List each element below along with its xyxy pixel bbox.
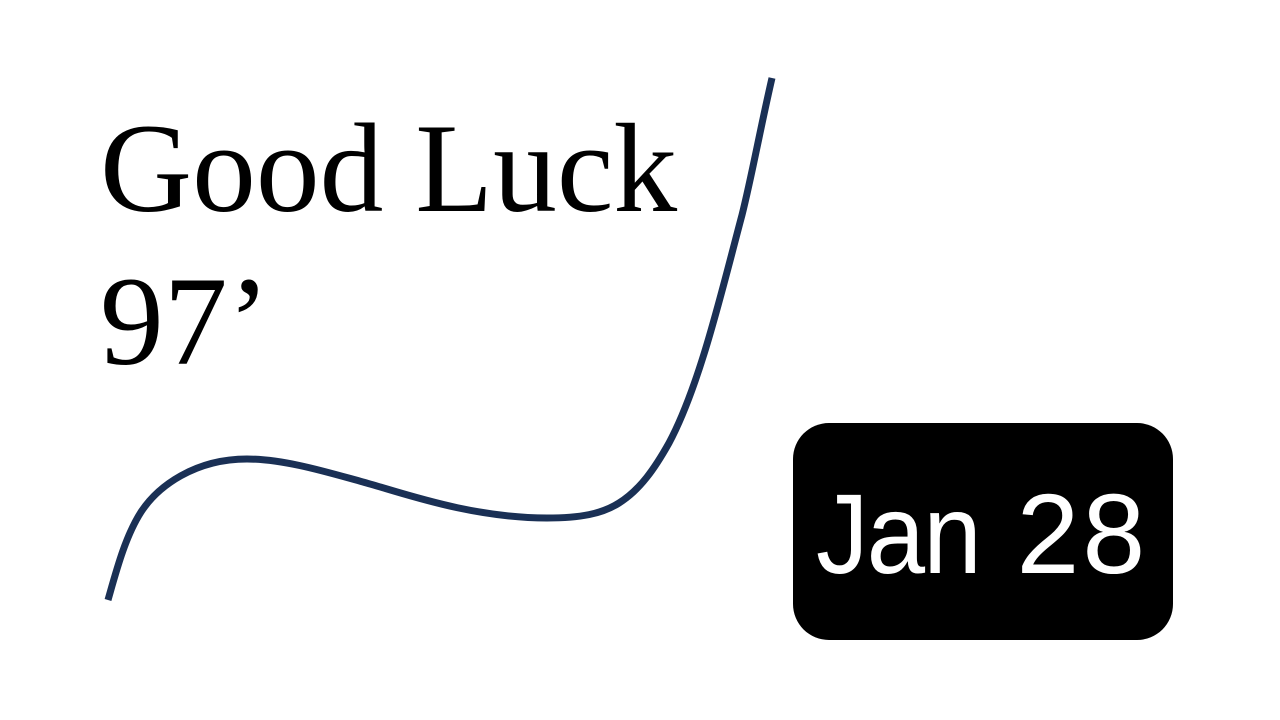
date badge <box>793 423 1173 640</box>
date badge: 28 <box>1016 471 1148 597</box>
title line 2: 97’ <box>100 250 270 392</box>
date badge: Jan <box>816 471 980 597</box>
title line 1: Good Luck <box>100 97 677 239</box>
